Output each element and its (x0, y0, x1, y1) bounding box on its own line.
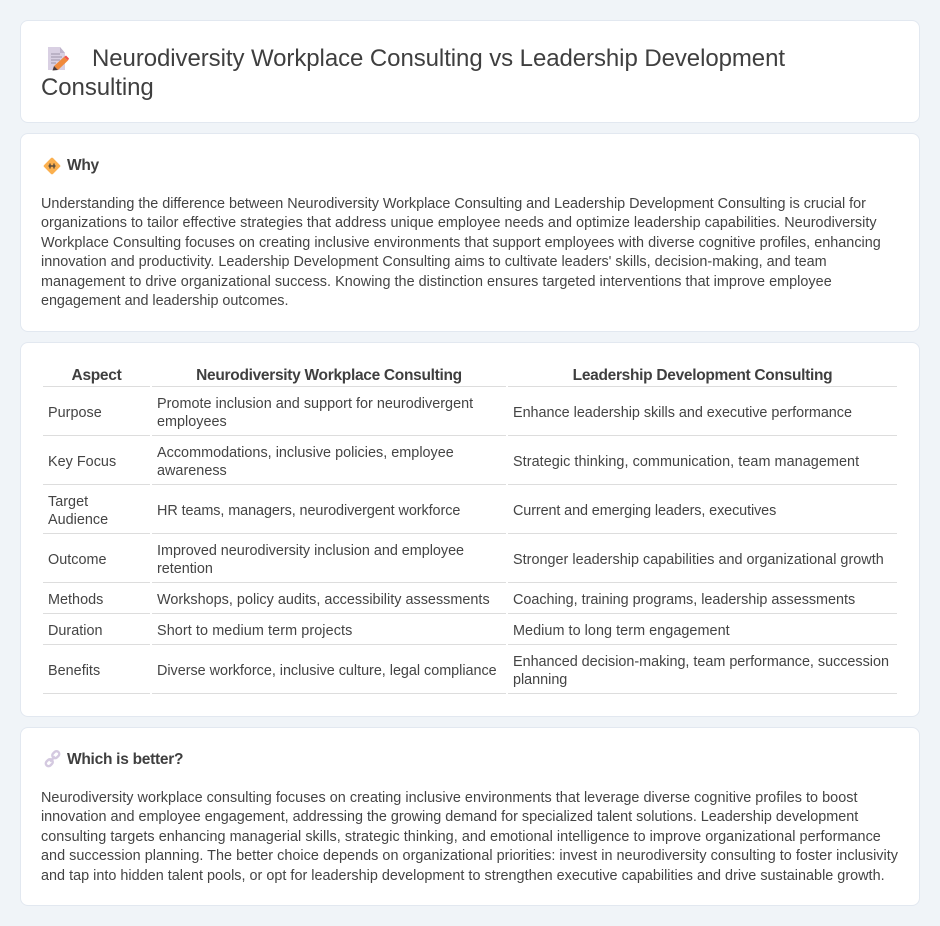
comparison table: HR teams, managers, neurodivergent workforce (157, 503, 460, 519)
comparison table: Accommodations, inclusive policies, employee (157, 445, 454, 461)
comparison table: Improved neurodiversity inclusion and employee (157, 543, 464, 559)
heading: why: Why (67, 157, 99, 174)
why paragraph (41, 196, 881, 309)
comparison table: Medium to long term engagement (513, 623, 730, 639)
icon: memo with pencil (48, 47, 69, 70)
comparison table: Stronger leadership capabilities and organizational growth (513, 552, 884, 568)
comparison table: Enhance leadership skills and executive performance (513, 405, 852, 421)
comparison table: Outcome (48, 552, 107, 568)
which is better paragraph (41, 790, 898, 884)
header panel (20, 20, 920, 123)
which is better paragraph: Neurodiversity workplace consulting focuses on creating inclusive environments that leverage diverse cognitive profiles to boost (41, 790, 858, 806)
title: Consulting (41, 74, 154, 101)
comparison table: Promote inclusion and support for neurodivergent (157, 396, 473, 412)
panel: why (20, 133, 920, 332)
comparison table: Short to medium term projects (157, 623, 352, 639)
comparison table: Workshops, policy audits, accessibility assessments (157, 592, 490, 608)
which is better paragraph: and succession planning. The better choice depends on organizational priorities: invest in neurodiversity consulting to foster inclusivity (41, 848, 898, 864)
title (41, 45, 785, 101)
comparison table: Methods (48, 592, 103, 608)
which is better paragraph: innovation and employee engagement, addressing the growing demand for specialized talent solutions. Leadership development (41, 809, 858, 825)
comparison table: Key Focus (48, 454, 116, 470)
comparison table: planning (513, 672, 567, 688)
title: Neurodiversity Workplace Consulting vs Leadership Development (92, 45, 785, 72)
comparison table: Audience (48, 512, 108, 528)
comparison table: Target (48, 494, 88, 510)
why paragraph: innovation and productivity. Leadership Development Consulting aims to cultivate leaders' skills, decision-making, and team (41, 254, 827, 270)
comparison table: Strategic thinking, communication, team management (513, 454, 859, 470)
comparison table: awareness (157, 463, 227, 479)
which is better paragraph: consulting targets enhancing managerial skills, strategic thinking, and emotional intelligence to improve organizational performance (41, 829, 881, 845)
which is better paragraph: and tap into hidden talent pools, or opt for leadership development to strengthen executive capabilities and drive sustainable growth. (41, 868, 885, 884)
comparison table: Duration (48, 623, 103, 639)
why paragraph: Understanding the difference between Neurodiversity Workplace Consulting and Leadership Development Consulting is crucial for (41, 196, 866, 212)
comparison table: Benefits (48, 663, 100, 679)
why paragraph: Workplace Consulting focuses on creating inclusive environments that support employees with diverse cognitive profiles, enhancing (41, 235, 881, 251)
why paragraph: organizations to tailor effective strategies that address unique employee needs and optimize leadership capabilities. Neurodiversity (41, 215, 877, 231)
comparison table: Current and emerging leaders, executives (513, 503, 776, 519)
panel: which is better (20, 727, 920, 906)
comparison table: Coaching, training programs, leadership assessments (513, 592, 855, 608)
heading: which is better: Which is better? (67, 751, 183, 768)
comparison table: retention (157, 561, 213, 577)
comparison table: Neurodiversity Workplace Consulting (196, 366, 462, 384)
comparison table (43, 366, 897, 694)
comparison table: Purpose (48, 405, 102, 421)
comparison table: Enhanced decision-making, team performance, succession (513, 654, 889, 670)
comparison table: Diverse workforce, inclusive culture, legal compliance (157, 663, 497, 679)
why paragraph: management to drive organizational success. Knowing the distinction ensures targeted interventions that improve employee (41, 274, 832, 290)
why paragraph: engagement and leadership outcomes. (41, 293, 288, 309)
icon: orange diamond sign (44, 158, 60, 174)
icon: link (44, 750, 60, 768)
comparison table: employees (157, 414, 227, 430)
comparison table: Aspect (72, 366, 121, 384)
comparison table: Leadership Development Consulting (573, 366, 832, 384)
panel: comparison table (20, 342, 920, 717)
